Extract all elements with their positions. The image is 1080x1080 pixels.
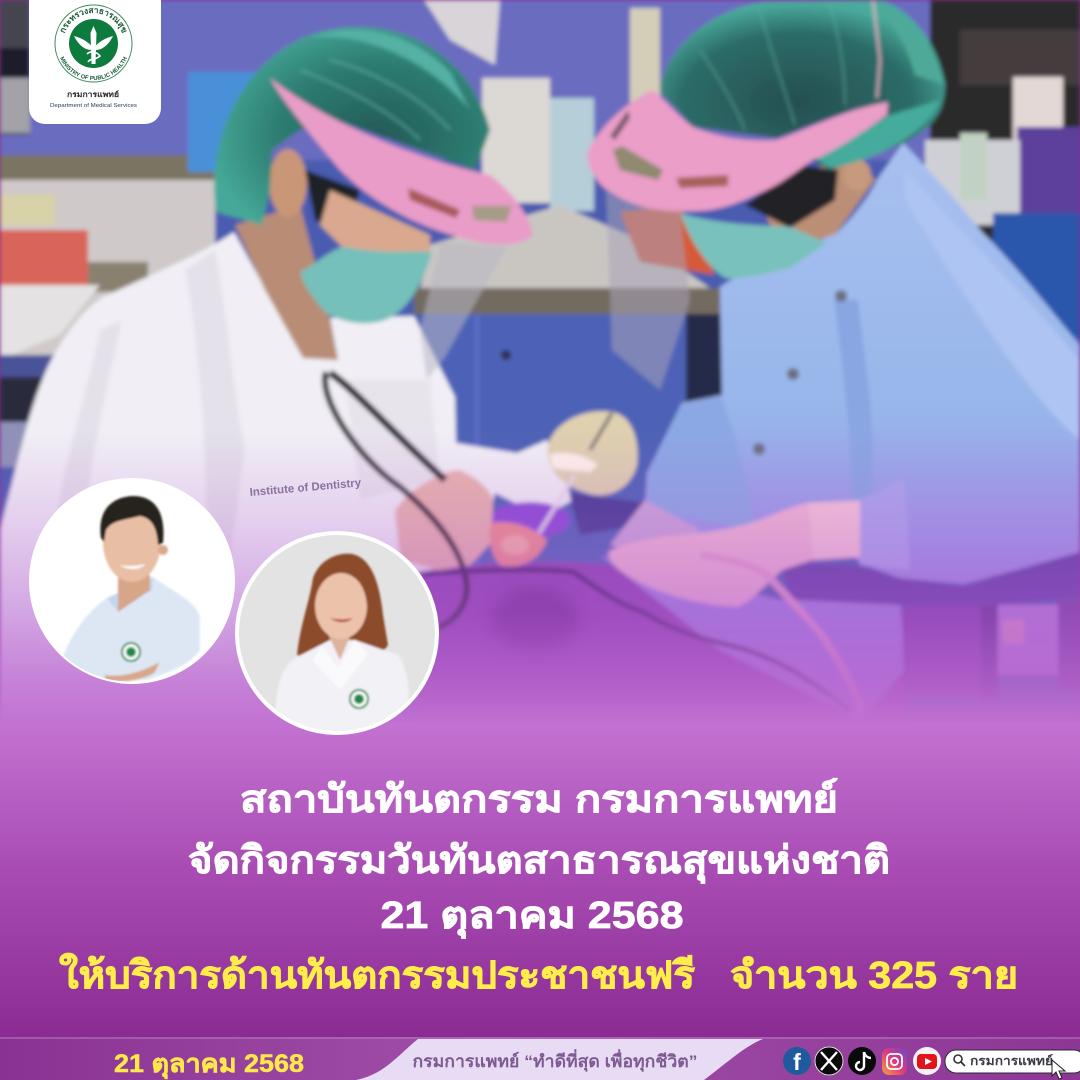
dark room upper right (930, 0, 1080, 240)
title line 4: highlight: ให้บริการด้านทันตกรรมประชาชนฟรี (59, 953, 696, 997)
icon: tiktok (848, 1047, 876, 1075)
title line 1: สถาบันทันตกรรม กรมการแพทย์ (240, 778, 838, 821)
right dentist mask (680, 213, 827, 278)
right dentist hair net (660, 0, 945, 170)
panel: purple title background (0, 725, 1080, 1037)
paper rolls and cups (482, 78, 550, 203)
search pill (945, 1050, 1080, 1073)
right dentist gown (645, 143, 1080, 584)
title block (59, 778, 1018, 997)
face shield right (606, 190, 690, 390)
portrait: woman (237, 533, 437, 735)
right gloved hand and forearm (610, 500, 700, 560)
logo emblem: กระทรวงสาธารณสุข (60, 8, 127, 34)
left dentist ear and hair (269, 149, 307, 217)
background wall (0, 0, 1080, 730)
left dentist neck (235, 205, 338, 360)
left dentist visor (270, 78, 533, 245)
left bare hand (395, 470, 493, 570)
logo caption: กรมการแพทย์ (67, 90, 119, 99)
icon: facebook: f (793, 1049, 801, 1075)
photo: dental clinic scene (0, 0, 1080, 730)
search pill: กรมการแพทย์ (970, 1054, 1053, 1068)
blue bin (188, 72, 266, 172)
title line 3: date: 21 ตุลาคม 2568 (380, 895, 684, 939)
tubes and instruments (325, 372, 467, 628)
counter, left side (0, 155, 215, 185)
patient mouth (490, 522, 547, 566)
left dentist mask (300, 247, 432, 323)
counter top, centre (415, 205, 720, 312)
cabinet (420, 314, 686, 584)
logo card: Department of Medical Services (50, 103, 137, 109)
icon: cursor (1052, 1060, 1065, 1079)
icon: X (815, 1047, 843, 1075)
title line 4: highlight (59, 953, 1018, 997)
logo emblem: MINISTRY OF PUBLIC HEALTH (60, 56, 127, 80)
purple glow around mouth (490, 502, 570, 538)
coat lettering: Institute of Dentistry (249, 477, 362, 499)
title line 2: จัดกิจกรรมวันทันตสาธารณสุขแห่งชาติ (188, 840, 890, 884)
portrait: man (29, 478, 235, 684)
logo emblem (54, 4, 132, 82)
footer date: 21 ตุลาคม 2568 (114, 1050, 304, 1080)
left dentist face (320, 190, 430, 258)
slogan text: กรมการแพทย์ “ทำดีที่สุด เพื่อทุกชีวิต” (412, 1049, 698, 1072)
logo card (29, 0, 161, 124)
left dentist hair net (214, 27, 490, 225)
slogan band (356, 1039, 763, 1080)
patient drape (400, 562, 910, 730)
footer bar (0, 1037, 1080, 1080)
icon: facebook (783, 1047, 811, 1075)
chair arm (782, 552, 1080, 608)
left gloved hand holding mirror (548, 411, 638, 495)
purple fade overlay (0, 430, 1080, 726)
icon: youtube (913, 1047, 941, 1075)
left dentist coat (0, 232, 573, 730)
left dentist face shield (420, 243, 507, 380)
title line 4: highlight: จำนวน 325 ราย (730, 955, 1018, 997)
right dentist visor (587, 90, 888, 211)
right dentist face under visor (760, 150, 875, 245)
icon: instagram (882, 1048, 907, 1075)
